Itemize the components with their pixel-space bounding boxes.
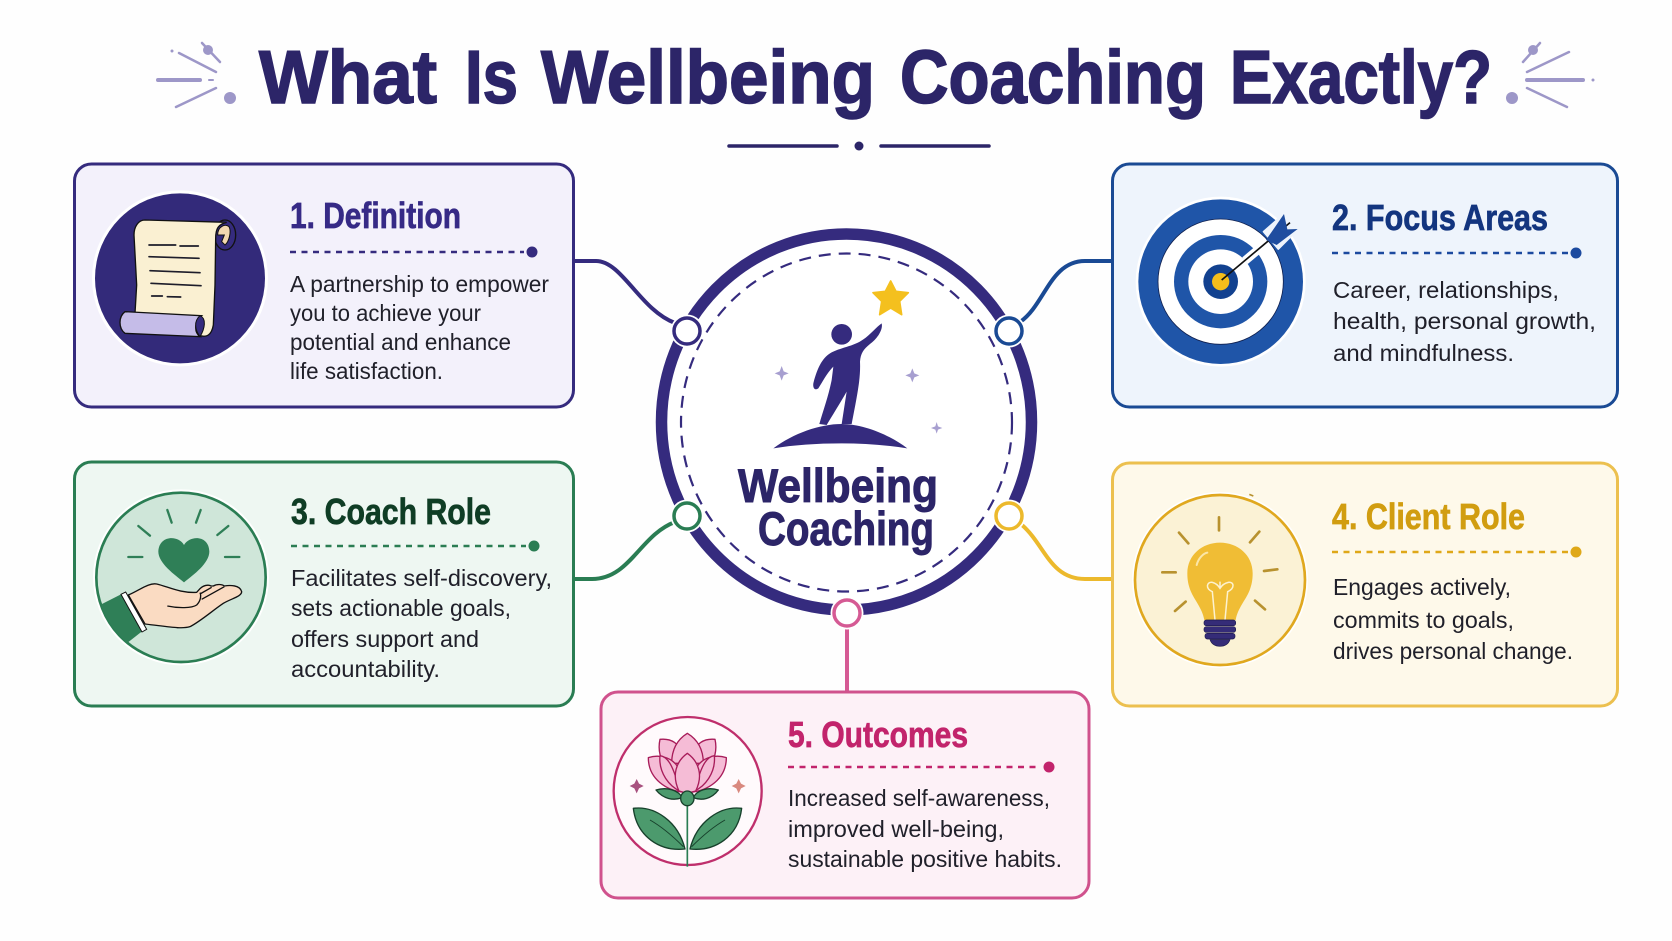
body text	[1333, 277, 1596, 366]
heading: 3. Coach Role	[291, 491, 491, 532]
heading: 2. Focus Areas	[1332, 197, 1548, 238]
icon: right title sparkle burst	[1506, 43, 1594, 107]
body text: accountability.	[291, 656, 440, 682]
body text: sets actionable goals,	[291, 595, 511, 621]
body text: improved well-being,	[788, 816, 1004, 842]
body text: commits to goals,	[1333, 607, 1514, 633]
connector: focus areas	[1020, 261, 1112, 322]
icon: left title sparkle burst	[158, 43, 236, 107]
body text: and mindfulness.	[1333, 340, 1514, 366]
hub outer ring	[662, 234, 1032, 610]
icon: lotus flower	[614, 717, 762, 867]
dotted rule	[290, 246, 538, 258]
body text: Career, relationships,	[1333, 277, 1559, 303]
card background	[1112, 164, 1618, 407]
body text: Facilitates self-discovery,	[291, 565, 552, 591]
panel: 4. Client Role	[1112, 463, 1618, 706]
card background	[1112, 463, 1618, 706]
connector: coach role	[574, 522, 675, 579]
panel: 5. Outcomes	[601, 692, 1089, 898]
hub label: Coaching	[758, 502, 934, 555]
icon: scroll	[92, 190, 268, 366]
icon: hand holding heart	[93, 489, 269, 665]
hub label: Wellbeing	[738, 459, 938, 512]
dotted rule	[291, 540, 540, 552]
dotted rule	[788, 762, 1054, 772]
title: What	[259, 35, 437, 119]
title: Coaching	[900, 35, 1206, 119]
panel: 3. Coach Role	[74, 462, 574, 706]
panel: 1. Definition	[74, 164, 574, 407]
body text: Increased self-awareness,	[788, 785, 1050, 811]
icon: target with arrow	[1136, 197, 1306, 367]
body text: offers support and	[291, 626, 479, 652]
body text: sustainable positive habits.	[788, 846, 1062, 872]
body text: A partnership to empower	[290, 271, 549, 297]
body text: you to achieve your	[290, 300, 481, 326]
title: Exactly?	[1230, 35, 1492, 119]
body text: health, personal growth,	[1333, 308, 1596, 334]
body text: potential and enhance	[290, 329, 511, 355]
dotted rule	[1332, 248, 1582, 258]
card background	[74, 164, 574, 407]
connector: definition	[574, 261, 675, 323]
card background	[601, 692, 1089, 898]
icon: person reaching for star	[773, 281, 942, 448]
body text: drives personal change.	[1333, 638, 1573, 664]
hub label	[738, 459, 938, 555]
connector: outcomes	[845, 625, 849, 692]
dotted rule	[1332, 546, 1582, 558]
icon: light bulb	[1132, 492, 1308, 668]
card background	[74, 462, 574, 706]
panel: 2. Focus Areas	[1112, 164, 1618, 407]
body text	[1333, 574, 1573, 664]
hub dashed ring	[681, 254, 1012, 592]
title: Is	[465, 35, 518, 119]
body text: Engages actively,	[1333, 574, 1511, 600]
heading: 5. Outcomes	[788, 714, 968, 755]
body text	[788, 785, 1062, 872]
title	[259, 35, 1492, 119]
heading: 1. Definition	[290, 195, 461, 236]
body text: life satisfaction.	[290, 358, 443, 384]
connector: client role	[1022, 525, 1112, 579]
panel: central hub	[662, 234, 1032, 630]
hub connector nodes	[670, 314, 1026, 630]
title: Wellbeing	[541, 35, 875, 119]
title divider	[729, 142, 989, 150]
body text	[291, 565, 552, 682]
heading: 4. Client Role	[1332, 496, 1525, 537]
body text	[290, 271, 549, 384]
